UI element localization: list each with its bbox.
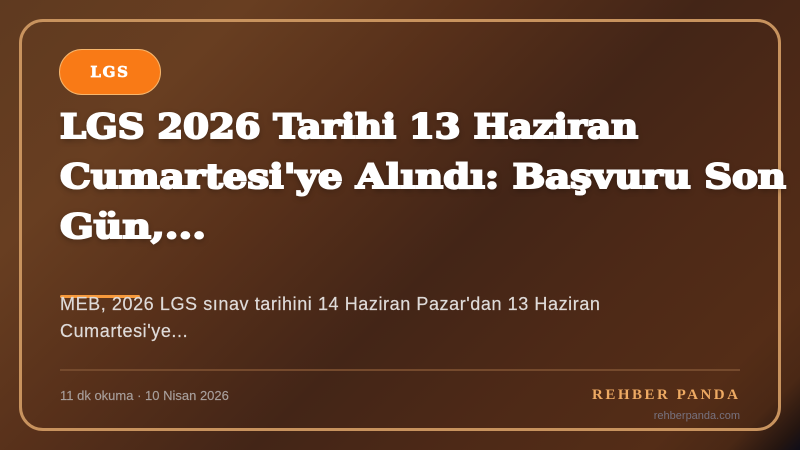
description <box>60 294 601 342</box>
badge: LGS <box>59 49 161 95</box>
background panel: Cumartesi'ye... <box>60 321 188 341</box>
brand name: REHBER PANDA <box>592 387 740 403</box>
background panel: MEB, 2026 LGS sınav tarihini 14 Haziran Pazar'dan 13 Haziran <box>60 294 601 314</box>
badge: LGS: LGS <box>90 63 130 81</box>
reading time and date: 11 dk okuma · 10 Nisan 2026 <box>60 388 229 403</box>
accent rule <box>60 295 140 298</box>
background panel: LGS 2026 Tarihi 13 Haziran <box>60 107 638 147</box>
background panel: Cumartesi'ye Alındı: Başvuru Son <box>60 157 786 197</box>
title <box>59 107 786 247</box>
background panel: Gün,... <box>60 207 206 247</box>
site url: rehberpanda.com <box>654 410 740 422</box>
